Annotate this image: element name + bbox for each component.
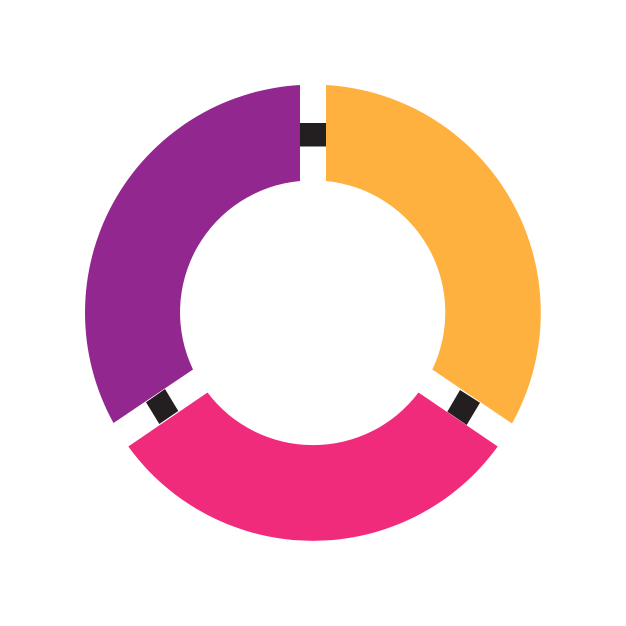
purple segment — [85, 85, 300, 423]
orange segment — [326, 85, 541, 424]
top connector — [300, 123, 326, 146]
lower left connector — [146, 389, 178, 424]
lower right connector — [447, 390, 480, 425]
pink segment — [128, 392, 498, 541]
